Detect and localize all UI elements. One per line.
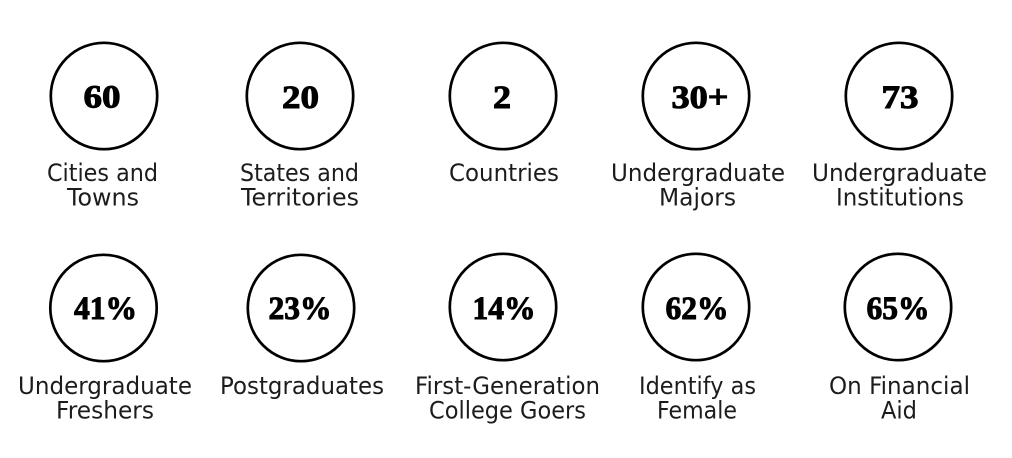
stat: 62% identify as female bbox=[639, 254, 756, 424]
stat: 14% first-generation college goers: First-Generation bbox=[415, 372, 600, 400]
stat: 30+ undergraduate majors bbox=[611, 43, 785, 211]
stat: 20 states and territories: 20 bbox=[282, 80, 319, 116]
stat: 23% postgraduates bbox=[220, 255, 384, 400]
stat: 41% undergraduate freshers: 41% bbox=[74, 291, 137, 327]
stat: 65% on financial aid: Aid bbox=[881, 396, 917, 424]
stat: 14% first-generation college goers: College Goers bbox=[429, 396, 586, 424]
stat: 41% undergraduate freshers: Undergraduate bbox=[18, 372, 192, 400]
stat: 30+ undergraduate majors: 30+ bbox=[672, 80, 728, 116]
stat: 20 states and territories: States and bbox=[240, 159, 359, 187]
stat: 41% undergraduate freshers: Freshers bbox=[56, 396, 154, 424]
stat: 30+ undergraduate majors: Undergraduate bbox=[611, 159, 785, 187]
stat: 60 cities and towns bbox=[47, 43, 158, 211]
stat: 65% on financial aid: On Financial bbox=[829, 372, 970, 400]
stat: 20 states and territories: Territories bbox=[240, 184, 359, 212]
stat: 2 countries bbox=[449, 43, 559, 187]
stat: 60 cities and towns: Towns bbox=[66, 184, 139, 212]
stat: 20 states and territories bbox=[240, 43, 359, 211]
stat: 73 undergraduate institutions: Institutions bbox=[836, 184, 964, 212]
stat: 62% identify as female: Identify as bbox=[639, 372, 756, 400]
stat: 73 undergraduate institutions bbox=[812, 43, 987, 211]
stat: 2 countries: 2 bbox=[493, 80, 511, 116]
stat: 2 countries: Countries bbox=[449, 159, 559, 187]
stat: 14% first-generation college goers bbox=[415, 254, 600, 424]
stat: 62% identify as female: 62% bbox=[666, 291, 728, 327]
stat: 73 undergraduate institutions: Undergraduate bbox=[812, 159, 987, 187]
stat: 60 cities and towns: 60 bbox=[84, 80, 120, 116]
stat: 62% identify as female: Female bbox=[657, 396, 737, 424]
stat: 30+ undergraduate majors: Majors bbox=[659, 184, 736, 212]
stat: 65% on financial aid: 65% bbox=[866, 291, 930, 327]
stat: 65% on financial aid bbox=[829, 254, 970, 424]
stat: 23% postgraduates: Postgraduates bbox=[220, 372, 384, 400]
stat: 14% first-generation college goers: 14% bbox=[472, 291, 536, 327]
stat: 41% undergraduate freshers bbox=[18, 255, 192, 424]
stat: 73 undergraduate institutions: 73 bbox=[882, 80, 918, 116]
stat: 23% postgraduates: 23% bbox=[268, 291, 332, 327]
stat: 60 cities and towns: Cities and bbox=[47, 159, 158, 187]
